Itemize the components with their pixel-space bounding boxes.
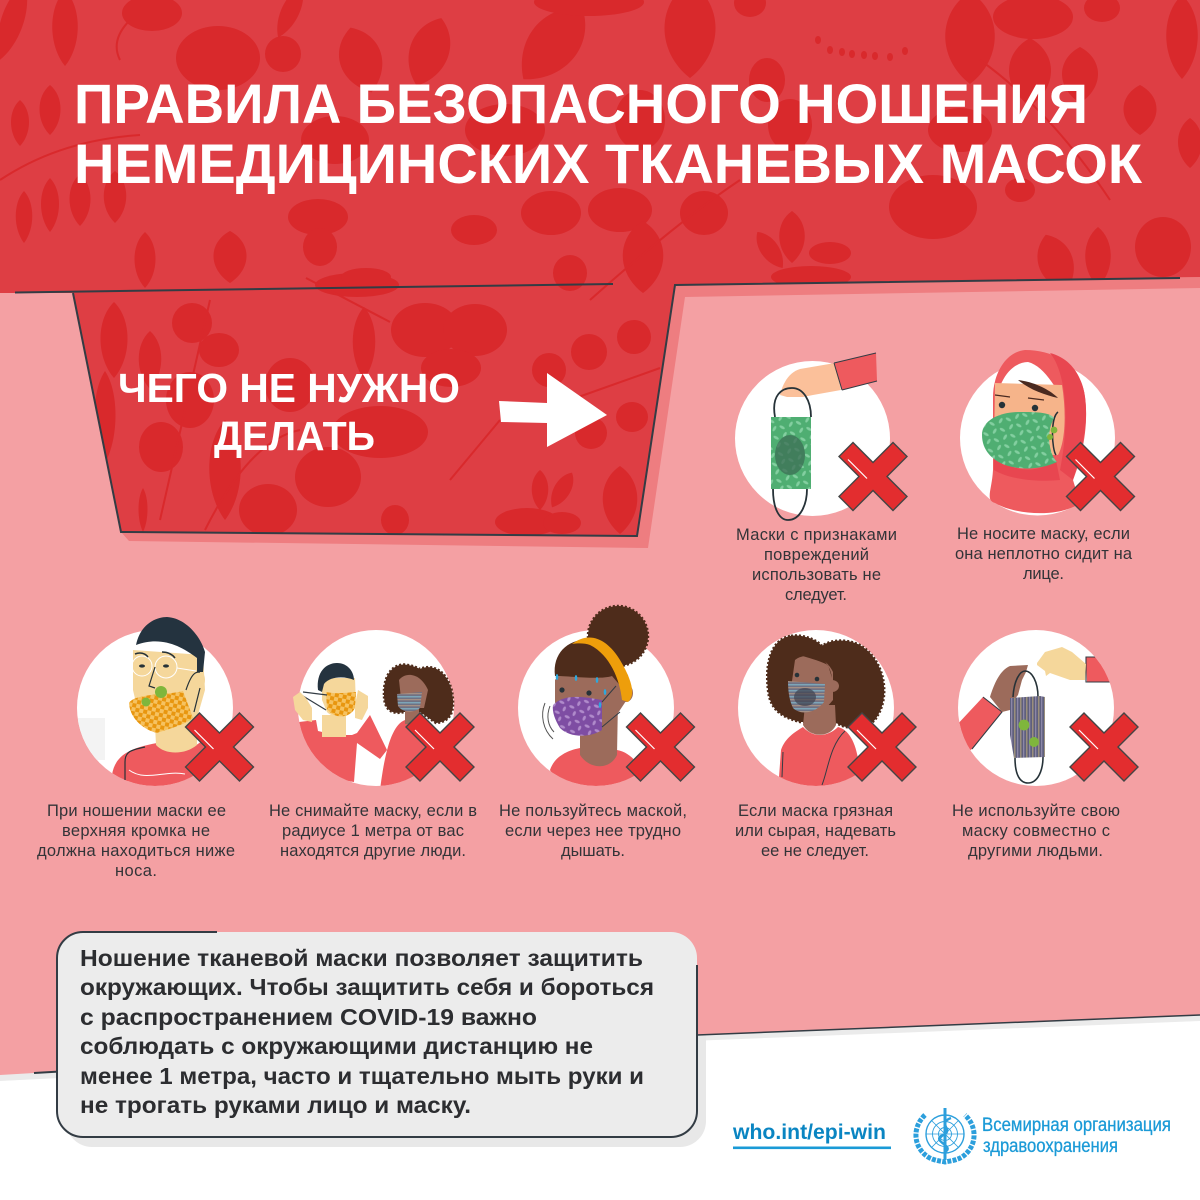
shadow of the note — [66, 945, 706, 1147]
shadow of the red banner — [121, 277, 1200, 548]
note text: окружающих. Чтобы защитить себя и бороться — [80, 974, 654, 1000]
icon: man removing mask — [293, 663, 387, 782]
title: ПРАВИЛА БЕЗОПАСНОГО НОШЕНИЯ — [74, 72, 1088, 135]
note text: не трогать руками лицо и маску. — [80, 1092, 471, 1118]
icon: cross — [848, 713, 916, 781]
caption: loose mask — [955, 525, 1133, 583]
icon: woman with dirty mask — [767, 635, 884, 800]
caption: dirty mask: ее не следует. — [761, 842, 869, 860]
caption: do not remove mask: находятся другие люди. — [280, 842, 466, 860]
panel: damaged mask — [735, 353, 890, 520]
caption: damaged mask: следует. — [785, 586, 847, 604]
caption: hard to breathe — [499, 802, 687, 860]
icon: man with mask below nose — [78, 617, 205, 786]
panel: loose mask — [960, 350, 1115, 516]
caption: damaged mask: использовать не — [752, 566, 881, 584]
note text — [80, 945, 654, 1118]
caption: loose mask: она неплотно сидит на — [955, 545, 1133, 563]
caption: mask below nose: При ношении маски ее — [47, 802, 226, 820]
caption: do not remove mask: Не снимайте маску, если в — [269, 802, 477, 820]
background: pink panel — [0, 270, 1200, 1075]
caption: dirty mask: или сырая, надевать — [735, 822, 896, 840]
icon: woman in hijab with loose mask — [982, 350, 1086, 513]
callout: protect others note — [57, 932, 697, 1137]
caption: mask below nose — [37, 802, 235, 880]
caption: do not share mask — [952, 802, 1120, 860]
web link: who.int/epi-win — [732, 1121, 886, 1144]
line at bottom right of pink area — [697, 1015, 1200, 1035]
icon: cross — [839, 442, 907, 510]
note text: Ношение тканевой маски позволяет защитить — [80, 945, 643, 971]
note text: менее 1 метра, часто и тщательно мыть руки и — [80, 1063, 644, 1089]
icon: hand holding mask — [780, 353, 877, 397]
title — [74, 72, 1143, 195]
panel: dirty or wet mask — [738, 630, 894, 800]
panel: do not remove mask near people — [293, 630, 454, 790]
caption: damaged mask: Маски с признаками — [736, 526, 897, 544]
caption: loose mask: Не носите маску, если — [957, 525, 1130, 543]
icon: cross — [406, 713, 474, 781]
caption: do not share mask: маску совместно с — [962, 822, 1110, 840]
caption: do not share mask: Не используйте свою — [952, 802, 1120, 820]
caption: hard to breathe: если через нее трудно — [505, 822, 681, 840]
icon: cross — [626, 713, 694, 781]
caption: damaged mask — [736, 526, 897, 604]
caption: dirty mask: Если маска грязная — [738, 802, 893, 820]
caption: do not remove mask — [269, 802, 477, 860]
caption: mask below nose: верхняя кромка не — [62, 822, 210, 840]
caption: hard to breathe: Не пользуйтесь маской, — [499, 802, 687, 820]
icon: cross — [1066, 442, 1134, 510]
panel: hard to breathe — [518, 606, 674, 800]
icon: woman nearby with mask — [380, 664, 453, 790]
panel: do not share mask — [955, 630, 1114, 786]
note text: соблюдать с окружающими дистанцию не — [80, 1033, 593, 1059]
caption: do not share mask: другими людьми. — [968, 842, 1103, 860]
icon: damaged green mask — [771, 388, 811, 520]
outline strokes of the banner — [15, 278, 1180, 536]
title: НЕМЕДИЦИНСКИХ ТКАНЕВЫХ МАСОК — [74, 132, 1143, 195]
heading: what not to do: ЧЕГО НЕ НУЖНО — [118, 365, 460, 411]
icon: cross — [1070, 713, 1138, 781]
caption: loose mask: лице. — [1023, 565, 1064, 583]
text: WHO name: Всемирная организация — [982, 1114, 1171, 1136]
caption: mask below nose: носа. — [115, 862, 157, 880]
icon: WHO logo — [916, 1108, 974, 1162]
caption: mask below nose: должна находиться ниже — [37, 842, 235, 860]
line at bottom left of pink area — [34, 1072, 60, 1073]
icon: hands sharing a mask — [955, 647, 1112, 783]
heading: what not to do: ДЕЛАТЬ — [214, 413, 375, 459]
text: WHO name — [982, 1114, 1171, 1157]
text: WHO name: здравоохранения — [983, 1135, 1118, 1157]
icon: cross — [186, 713, 254, 781]
heading: what not to do — [118, 365, 460, 459]
background: grey shadow under pink area — [0, 1068, 60, 1081]
caption: hard to breathe: дышать. — [561, 842, 625, 860]
background: grey shadow right of note — [690, 1010, 1200, 1041]
icon: woman struggling to breathe — [543, 606, 648, 800]
panel: mask below nose — [77, 617, 233, 786]
note text: с распространением COVID-19 важно — [80, 1004, 537, 1030]
caption: do not remove mask: радиусе 1 метра от вас — [282, 822, 464, 840]
red header with leaf pattern — [0, 0, 1200, 536]
caption: dirty mask — [735, 802, 896, 860]
caption: damaged mask: повреждений — [764, 546, 869, 564]
arrow — [499, 373, 607, 447]
